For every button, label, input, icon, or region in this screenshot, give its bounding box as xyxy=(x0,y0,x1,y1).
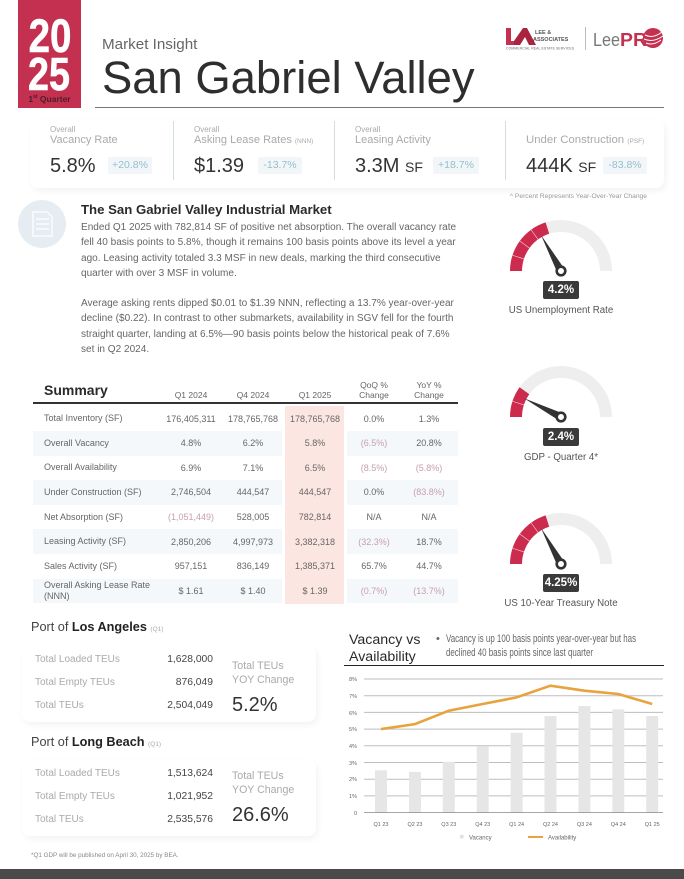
table rows: 7.1% xyxy=(243,463,263,473)
chart heading: Vacancy vs xyxy=(349,632,420,648)
table rows: 836,149 xyxy=(237,561,269,571)
column headers: YoY % xyxy=(416,380,442,390)
KPI: vacancy rate: 5.8% xyxy=(50,155,96,177)
year badge xyxy=(18,0,81,108)
gauge: GDP xyxy=(510,366,612,423)
Long Beach stats xyxy=(35,768,294,826)
highlighted column xyxy=(285,406,344,604)
column headers: Q4 2024 xyxy=(237,390,269,400)
legend xyxy=(460,835,576,842)
Los Angeles stats xyxy=(35,654,294,716)
grid xyxy=(364,679,663,796)
table rows: (5.8%) xyxy=(416,463,442,473)
paragraph 2: set in Q2 2024. xyxy=(81,344,149,355)
paragraph 2: decline ($0.22). In contrast to other submarkets, availability in SGV fell for the fourth xyxy=(81,313,453,324)
y labels: 6% xyxy=(349,711,357,717)
logo: Lee & Associates xyxy=(506,28,575,50)
x labels: Q3 24 xyxy=(577,822,592,828)
value: unemployment: 4.2% xyxy=(548,284,574,296)
table rows: 44.7% xyxy=(416,561,442,571)
year digits: 25 xyxy=(28,48,70,100)
table rows: Leasing Activity (SF) xyxy=(44,536,126,546)
KPI: vacancy rate: Vacancy Rate xyxy=(50,134,118,146)
KPI: vacancy rate xyxy=(50,125,152,177)
y labels: 5% xyxy=(349,727,357,733)
market heading: The San Gabriel Valley Industrial Market xyxy=(81,202,332,217)
KPI: under construction: Under Construction (PSF) xyxy=(526,134,644,146)
value: unemployment xyxy=(543,281,579,299)
Los Angeles stats: Total TEUs xyxy=(35,700,84,711)
heading: Port of Los Angeles: Port of Los Angeles (Q1) xyxy=(31,620,163,634)
table rows: Overall Vacancy xyxy=(44,438,109,448)
table rows: 20.8% xyxy=(416,438,442,448)
chart heading: Availability xyxy=(349,648,416,664)
table rows: 65.7% xyxy=(361,561,387,571)
x labels: Q4 23 xyxy=(475,822,490,828)
y labels: 1% xyxy=(349,794,357,800)
table rows: 6.2% xyxy=(243,438,263,448)
table rows: 782,814 xyxy=(299,512,331,522)
y labels: 7% xyxy=(349,694,357,700)
Los Angeles stats: YOY Change xyxy=(232,674,294,686)
footer bar xyxy=(0,869,684,879)
x labels: Q4 24 xyxy=(611,822,626,828)
year digits: 20 xyxy=(29,10,71,63)
availability line xyxy=(381,686,652,729)
x labels: Q1 25 xyxy=(645,822,660,828)
value: GDP xyxy=(543,428,579,446)
label: GDP: GDP - Quarter 4* xyxy=(524,452,598,463)
x labels: Q1 23 xyxy=(374,822,388,828)
table rows: 1,385,371 xyxy=(295,561,335,571)
label: unemployment: US Unemployment Rate xyxy=(509,305,613,316)
Los Angeles stats: Total Loaded TEUs xyxy=(35,654,120,665)
legend: Vacancy xyxy=(469,836,492,842)
y labels xyxy=(349,677,357,817)
paragraph 2: Average asking rents dipped $0.01 to $1.39 NNN, reflecting a 13.7% year-over-year xyxy=(81,298,454,309)
title rule xyxy=(95,106,664,108)
KPI: asking lease rates xyxy=(194,125,313,177)
table rows: (83.8%) xyxy=(413,487,445,497)
table rows: 1.3% xyxy=(419,414,439,424)
KPI: under construction: 444K SF xyxy=(526,155,596,177)
table rows: 444,547 xyxy=(299,487,331,497)
table rows: Net Absorption (SF) xyxy=(44,512,123,522)
header rule xyxy=(33,402,458,404)
year digits xyxy=(28,10,71,100)
y labels: 2% xyxy=(349,777,357,783)
table rows: 6.9% xyxy=(181,463,201,473)
table rows: Sales Activity (SF) xyxy=(44,561,117,571)
table rows: 528,005 xyxy=(237,512,269,522)
table rows: Overall Asking Lease Rate (NNN) xyxy=(44,580,150,601)
legend: Availability xyxy=(548,836,576,842)
Los Angeles stats: 2,504,049 xyxy=(167,700,213,711)
Long Beach stats: 2,535,576 xyxy=(167,814,213,825)
panel: Long Beach xyxy=(22,760,316,836)
Long Beach stats: Total TEUs xyxy=(35,814,84,825)
table rows xyxy=(33,413,458,603)
KPI: leasing activity xyxy=(355,125,479,177)
table rows: 6.5% xyxy=(305,463,325,473)
quarter label: 1st Quarter xyxy=(28,94,71,104)
chart note: declined 40 basis points since last quarter xyxy=(446,646,593,658)
column headers xyxy=(175,380,444,400)
bars xyxy=(375,706,658,813)
heading: Port of Long Beach: Port of Long Beach (Q1) xyxy=(31,735,161,749)
table rows: (1,051,449) xyxy=(168,512,214,522)
table rows: 957,151 xyxy=(175,561,207,571)
KPI footnote: ^ Percent Represents Year-Over-Year Change xyxy=(510,193,647,200)
table rows: 4.8% xyxy=(181,438,201,448)
chart note: Vacancy is up 100 basis points year-over-year but has xyxy=(446,633,636,645)
column headers: Q1 2024 xyxy=(175,390,207,400)
KPI: leasing activity: +18.7% xyxy=(438,159,474,171)
x labels: Q2 24 xyxy=(543,822,558,828)
Los Angeles stats: 5.2% xyxy=(232,694,278,716)
title: San Gabriel Valley xyxy=(102,52,475,103)
table rows: 2,746,504 xyxy=(171,487,211,497)
chart: vacancy vs availability xyxy=(349,677,663,842)
y labels: 3% xyxy=(349,761,357,767)
Long Beach stats: Total TEUs xyxy=(232,770,284,782)
paragraph 1: Ended Q1 2025 with 782,814 SF of positive net absorption. The overall vacancy rate xyxy=(81,222,456,233)
table rows: 18.7% xyxy=(416,537,442,547)
table rows: 4,997,973 xyxy=(233,537,273,547)
gauge: unemployment xyxy=(510,220,612,277)
table rows: 3,382,318 xyxy=(295,537,335,547)
paragraph 1: quarter with over 3 MSF in volume. xyxy=(81,268,237,279)
logo: LeePRO xyxy=(593,28,663,50)
table rows: (0.7%) xyxy=(361,586,387,596)
KPI: asking lease rates: Overall xyxy=(194,125,219,134)
logo divider xyxy=(585,27,586,50)
KPI: asking lease rates: $1.39 xyxy=(194,155,244,177)
table rows: 0.0% xyxy=(364,487,384,497)
paragraph 2: straight quarter, landing at 6.5%—90 basis points below the historical peak of 7.6% xyxy=(81,329,450,340)
value: GDP: 2.4% xyxy=(548,431,574,443)
table rows: N/A xyxy=(421,512,436,522)
KPI: leasing activity: Overall xyxy=(355,125,380,134)
Los Angeles stats: 876,049 xyxy=(176,677,213,688)
x labels: Q3 23 xyxy=(441,822,456,828)
KPI: under construction: -83.8% xyxy=(608,159,642,171)
table rows: (6.5%) xyxy=(361,438,387,448)
KPI: asking lease rates: -13.7% xyxy=(263,159,297,171)
chart note: • xyxy=(436,633,440,645)
KPI: under construction xyxy=(526,134,647,177)
y labels: 4% xyxy=(349,744,357,750)
column headers: QoQ % xyxy=(360,380,388,390)
chart heading xyxy=(349,632,420,664)
table rows: Total Inventory (SF) xyxy=(44,413,123,423)
x labels: Q1 24 xyxy=(509,822,524,828)
subtitle: Market Insight xyxy=(102,36,197,53)
Long Beach stats: 26.6% xyxy=(232,804,289,826)
chart note xyxy=(436,633,636,658)
y labels: 0 xyxy=(354,811,357,817)
KPI: leasing activity: 3.3M SF xyxy=(355,155,423,177)
logo: LeePRO: PR xyxy=(620,30,647,50)
gauge: treasury xyxy=(510,513,612,570)
logo: Lee & Associates: COMMERCIAL REAL ESTATE SERVICES xyxy=(506,46,575,50)
value: treasury xyxy=(543,574,579,592)
chart rule xyxy=(344,664,664,666)
table rows: (32.3%) xyxy=(358,537,390,547)
column headers: Q1 2025 xyxy=(299,390,331,400)
table rows: 178,765,768 xyxy=(228,414,278,424)
KPI: asking lease rates: Asking Lease Rates (NNN) xyxy=(194,134,313,146)
footnote: *Q1 GDP will be published on April 30, 2025 by BEA. xyxy=(31,852,179,859)
table rows: Under Construction (SF) xyxy=(44,487,142,497)
y labels: 8% xyxy=(349,677,357,683)
logo: Lee & Associates: LEE & xyxy=(535,30,551,36)
table rows: 5.8% xyxy=(305,438,325,448)
logo: Lee & Associates: ASSOCIATES xyxy=(533,37,569,43)
paragraph 1 xyxy=(81,222,456,279)
paragraph 2 xyxy=(81,298,454,355)
table rows: 444,547 xyxy=(237,487,269,497)
Los Angeles stats: Total Empty TEUs xyxy=(35,677,115,688)
KPI: leasing activity: Leasing Activity xyxy=(355,134,431,146)
column headers: Change xyxy=(359,390,389,400)
Long Beach stats: 1,513,624 xyxy=(167,768,213,779)
table rows: $ 1.39 xyxy=(302,586,328,596)
table rows: 2,850,206 xyxy=(171,537,211,547)
icon: document xyxy=(18,200,66,248)
table heading: Summary xyxy=(44,382,108,398)
table rows: 178,765,768 xyxy=(290,414,340,424)
table rows: (8.5%) xyxy=(361,463,387,473)
table rows: (13.7%) xyxy=(413,586,445,596)
table rows: Overall Availability xyxy=(44,462,117,472)
x labels xyxy=(374,822,660,828)
panel: Los Angeles xyxy=(22,646,316,722)
summary table xyxy=(33,380,458,604)
value: treasury: 4.25% xyxy=(545,577,577,589)
KPI: vacancy rate: +20.8% xyxy=(112,159,148,171)
Long Beach stats: Total Empty TEUs xyxy=(35,791,115,802)
Long Beach stats: Total Loaded TEUs xyxy=(35,768,120,779)
Los Angeles stats: 1,628,000 xyxy=(167,654,213,665)
paragraph 1: ago. Leasing activity totaled 3.3 MSF in new deals, marking the third consecutive xyxy=(81,253,441,264)
table rows: 176,405,311 xyxy=(166,414,216,424)
panel: KPI strip xyxy=(30,120,664,188)
Long Beach stats: YOY Change xyxy=(232,784,294,796)
table rows: 0.0% xyxy=(364,414,384,424)
table rows: $ 1.61 xyxy=(178,586,204,596)
x labels: Q2 23 xyxy=(408,822,422,828)
Los Angeles stats: Total TEUs xyxy=(232,660,284,672)
column headers: Change xyxy=(414,390,444,400)
paragraph 1: fell 40 basis points to 5.8%, though it remains 100 basis points above its level a year xyxy=(81,237,456,248)
KPI: vacancy rate: Overall xyxy=(50,125,75,134)
table rows: $ 1.40 xyxy=(240,586,266,596)
label: treasury: US 10-Year Treasury Note xyxy=(504,598,618,609)
KPI dividers xyxy=(173,121,506,180)
table rows: N/A xyxy=(366,512,382,522)
Long Beach stats: 1,021,952 xyxy=(167,791,213,802)
logo: LeePRO: Lee xyxy=(593,30,620,50)
axis xyxy=(364,812,663,814)
